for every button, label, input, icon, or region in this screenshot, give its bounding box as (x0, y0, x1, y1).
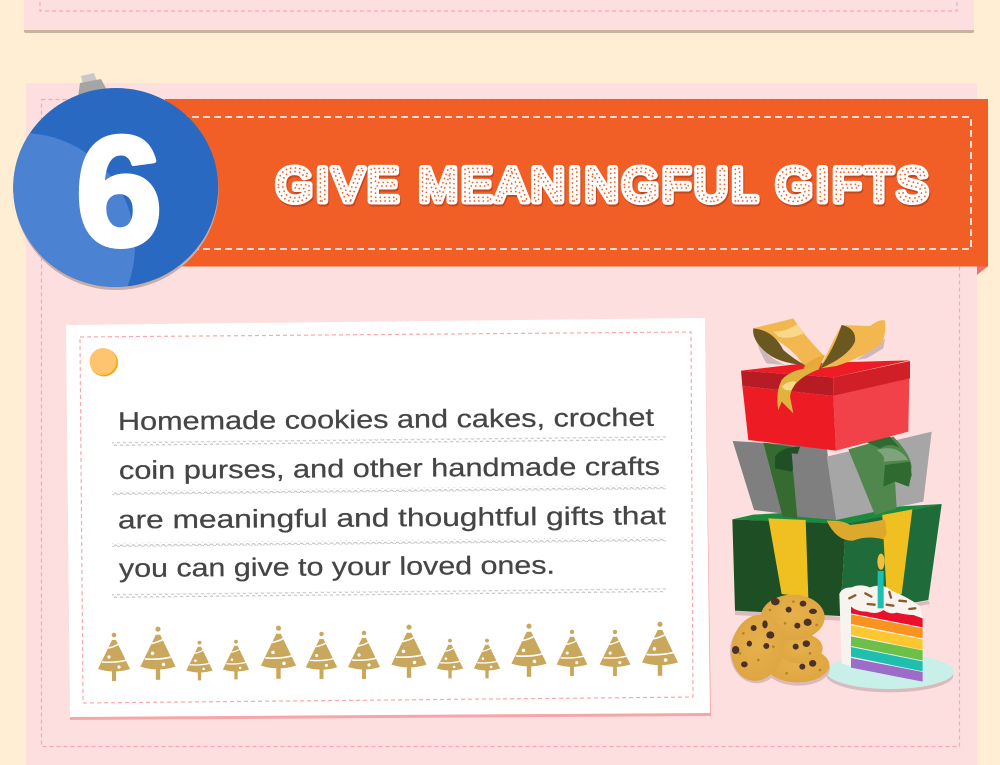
green gift box (732, 504, 942, 621)
illustration: gifts, cookies and cake (725, 318, 954, 692)
red gift box with bow (741, 318, 910, 451)
pin (90, 348, 118, 376)
tree row (98, 622, 678, 681)
note card (66, 318, 711, 720)
body text: are meaningful and thoughtful gifts that (118, 502, 666, 534)
candle (877, 554, 885, 608)
heading text: GIVE MEANINGFUL GIFTS (277, 160, 929, 213)
bow shadow (757, 338, 885, 365)
body text: you can give to your loved ones. (119, 552, 555, 583)
plate (826, 654, 954, 692)
number 6: 6 (76, 105, 162, 279)
ornament cap (78, 73, 108, 97)
cake slice (839, 554, 923, 682)
grey gift box (733, 432, 932, 520)
heading ribbon (165, 99, 988, 275)
bow (753, 318, 825, 367)
body text: coin purses, and other handmade crafts (119, 453, 660, 485)
panel: previous section (24, 0, 974, 33)
cookies (725, 595, 830, 686)
heading text: GIVE MEANINGFUL GIFTS (276, 158, 928, 211)
heading text: GIVE MEANINGFUL GIFTS (276, 158, 928, 211)
body text: Homemade cookies and cakes, crochet (118, 404, 654, 436)
number ornament (13, 73, 218, 290)
body text (118, 404, 666, 583)
